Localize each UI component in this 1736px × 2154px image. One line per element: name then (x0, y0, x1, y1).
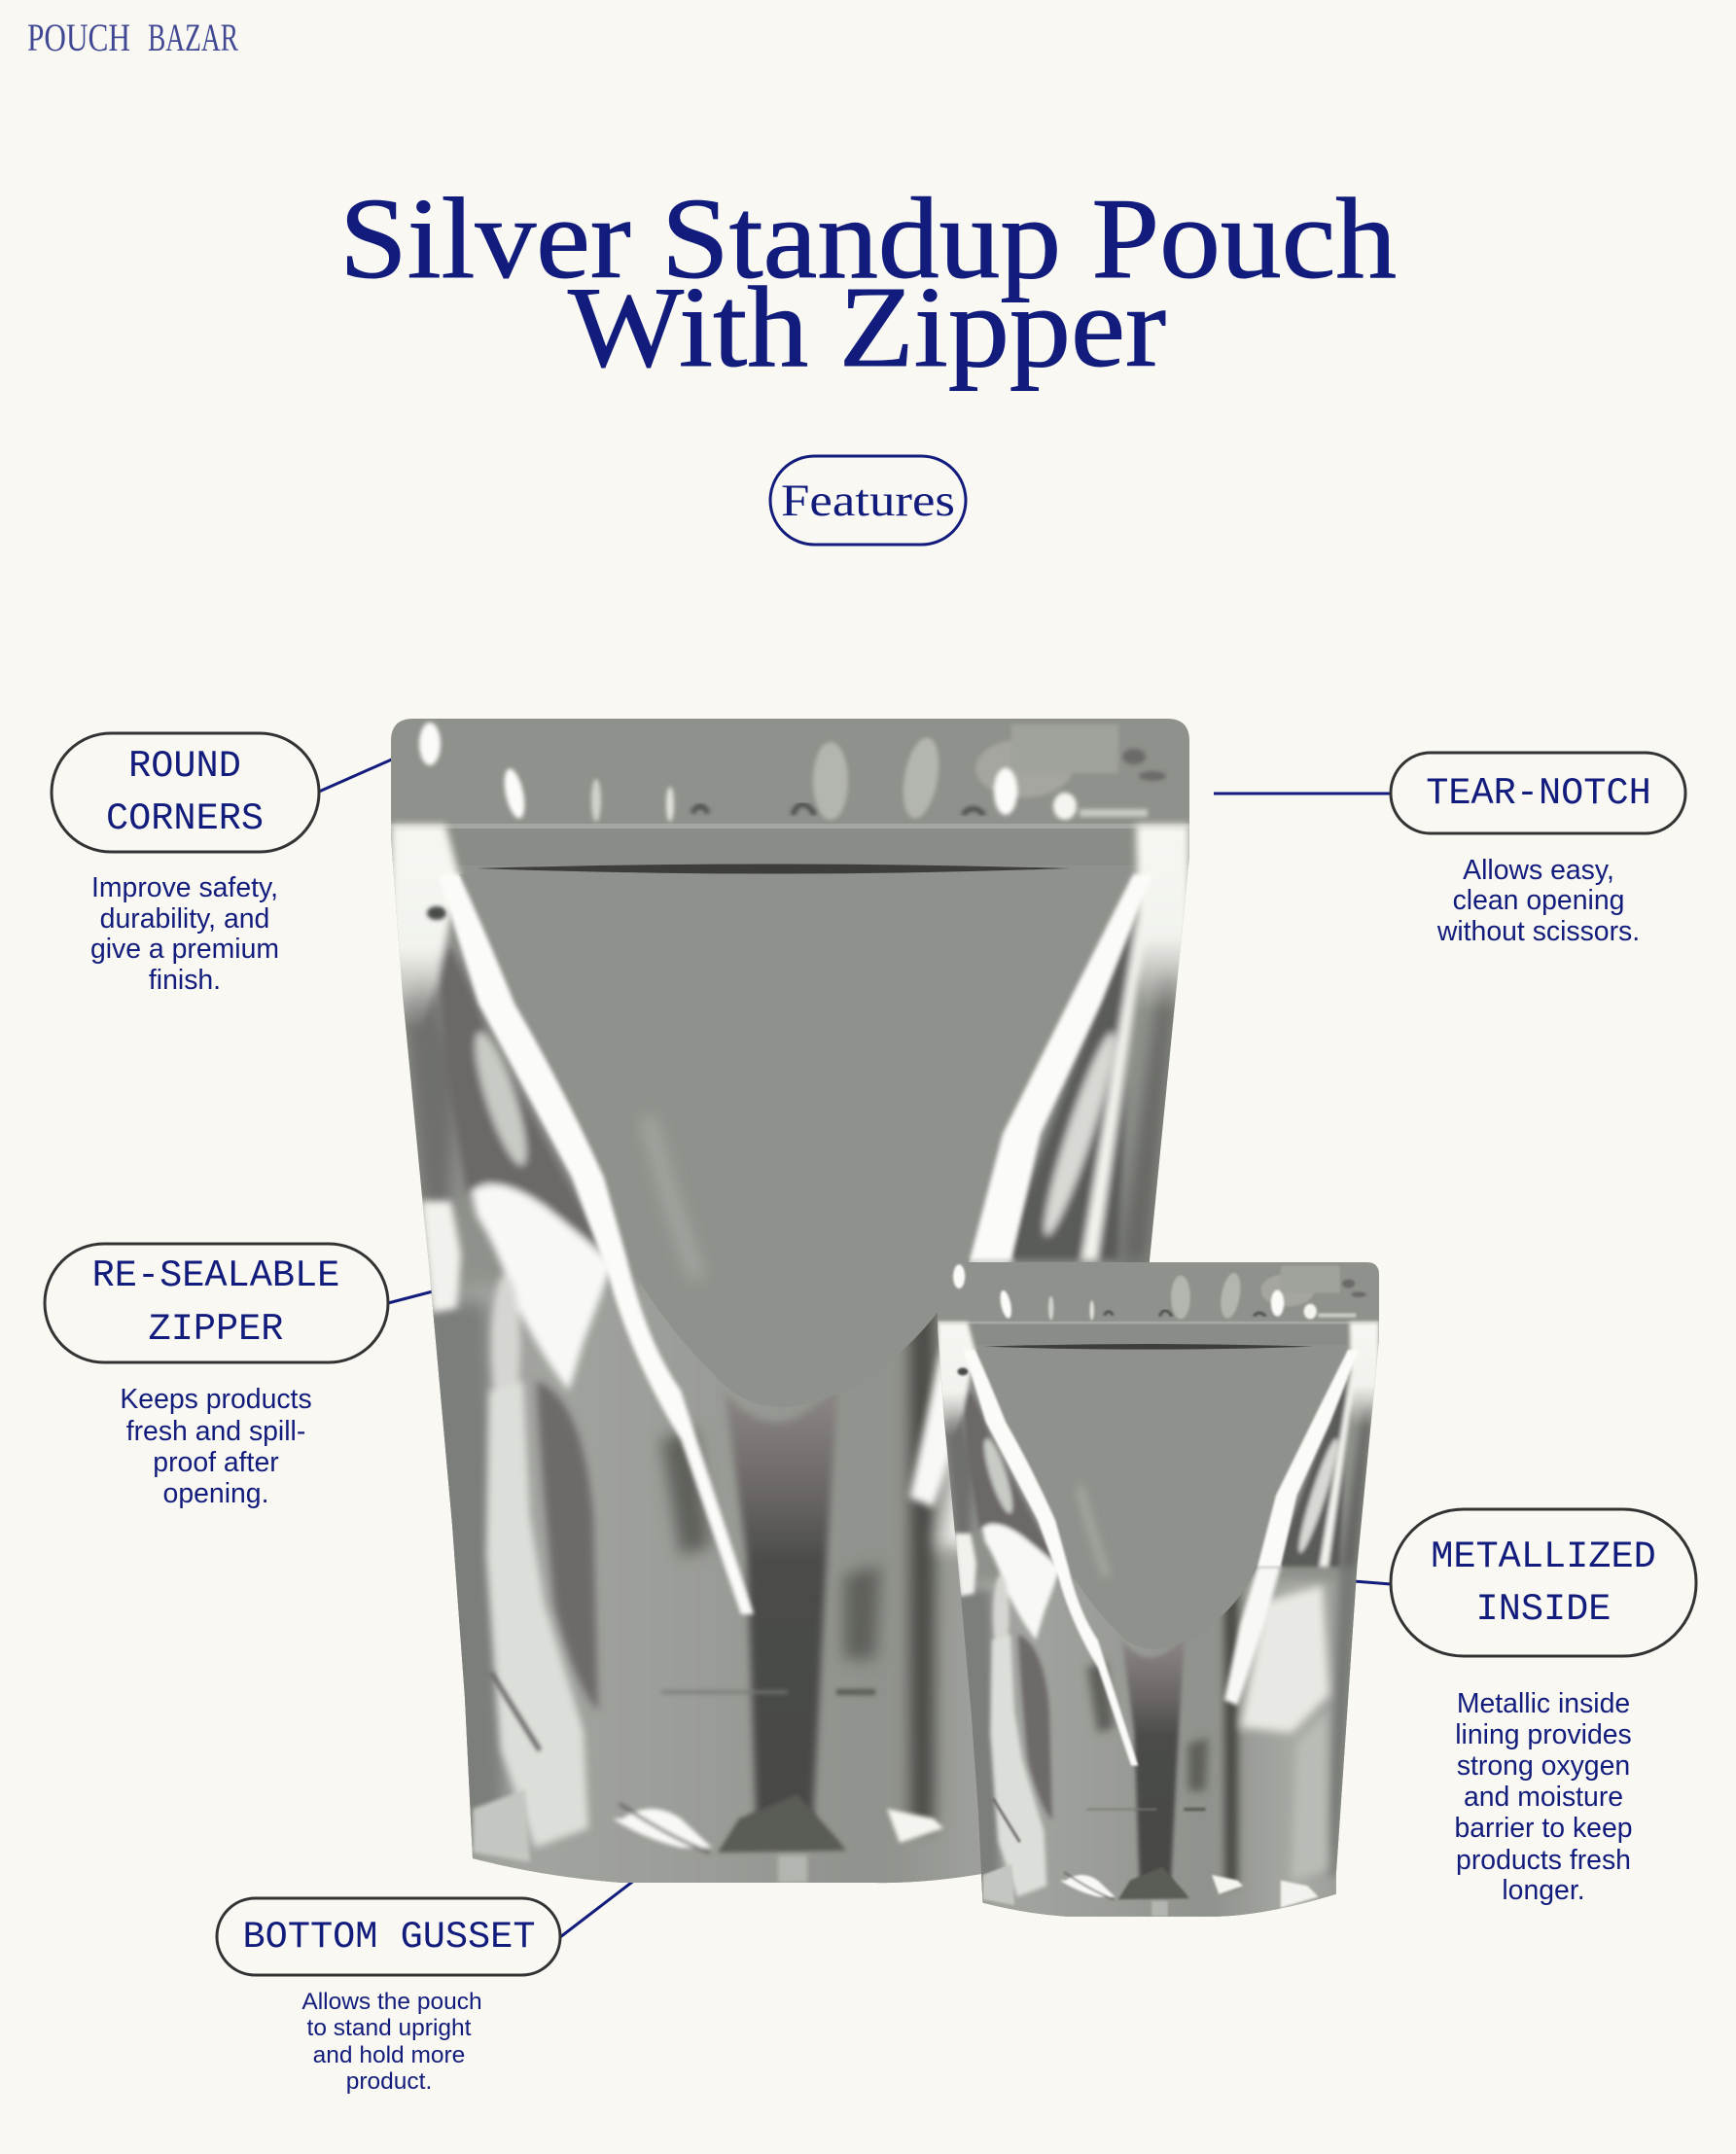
connector: round corners (319, 759, 394, 792)
callout: re-sealable zipper: Keeps products (120, 1384, 312, 1415)
callout: re-sealable zipper: RE-SEALABLE (92, 1254, 339, 1297)
callout: round corners: Improve safety, (91, 872, 278, 903)
logo (27, 16, 238, 59)
features badge (770, 456, 966, 545)
callout: metallized inside: and moisture (1464, 1782, 1623, 1813)
callout: round corners (52, 733, 319, 996)
callout: bottom gusset (217, 1898, 560, 2095)
title: Silver Standup Pouch (339, 174, 1397, 302)
callout: metallized inside: lining provides (1455, 1719, 1632, 1750)
callout: re-sealable zipper (45, 1244, 388, 1509)
logo: POUCH (27, 16, 130, 59)
callout: tear-notch (1391, 753, 1685, 947)
callout: bottom gusset: product. (346, 2068, 432, 2095)
features badge: Features (781, 476, 955, 526)
callout: round corners: ROUND (128, 745, 241, 788)
callout: tear-notch: clean opening (1453, 885, 1624, 916)
callout: metallized inside: strong oxygen (1457, 1750, 1630, 1782)
callout: round corners: durability, and (100, 903, 269, 935)
connector: re-sealable zipper (388, 1291, 433, 1303)
callout: metallized inside: Metallic inside (1457, 1688, 1630, 1719)
callout: metallized inside: METALLIZED (1431, 1536, 1656, 1578)
logo: BAZAR (148, 16, 238, 59)
small pouch (926, 1260, 1394, 1929)
callout: re-sealable zipper: ZIPPER (149, 1308, 283, 1351)
callout: metallized inside (1391, 1509, 1696, 1906)
callout: bottom gusset: to stand upright (307, 2015, 472, 2041)
connector: tear-notch (1214, 792, 1391, 795)
callout: tear-notch: without scissors. (1436, 916, 1640, 947)
connector: bottom gusset (560, 1880, 635, 1937)
callout: metallized inside: INSIDE (1476, 1588, 1611, 1631)
callout: tear-notch: TEAR-NOTCH (1426, 772, 1651, 815)
callout: metallized inside: barrier to keep (1454, 1813, 1633, 1844)
callout: bottom gusset: Allows the pouch (301, 1989, 482, 2015)
callout: bottom gusset: and hold more (313, 2042, 465, 2068)
title (339, 174, 1397, 391)
callout: round corners: give a premium (90, 934, 279, 965)
callout: round corners: CORNERS (106, 797, 264, 840)
callout: metallized inside: products fresh (1456, 1845, 1631, 1876)
callout: re-sealable zipper: fresh and spill- (126, 1416, 305, 1447)
callout: metallized inside: longer. (1502, 1875, 1585, 1906)
callout: tear-notch: Allows easy, (1463, 855, 1614, 886)
callout: round corners: finish. (149, 965, 221, 996)
title: With Zipper (568, 263, 1166, 391)
callout: bottom gusset: BOTTOM GUSSET (243, 1916, 535, 1959)
connector: metallized inside (1354, 1581, 1391, 1584)
callout: re-sealable zipper: proof after (153, 1447, 279, 1478)
callout: re-sealable zipper: opening. (163, 1478, 268, 1509)
large pouch (370, 715, 1216, 1906)
